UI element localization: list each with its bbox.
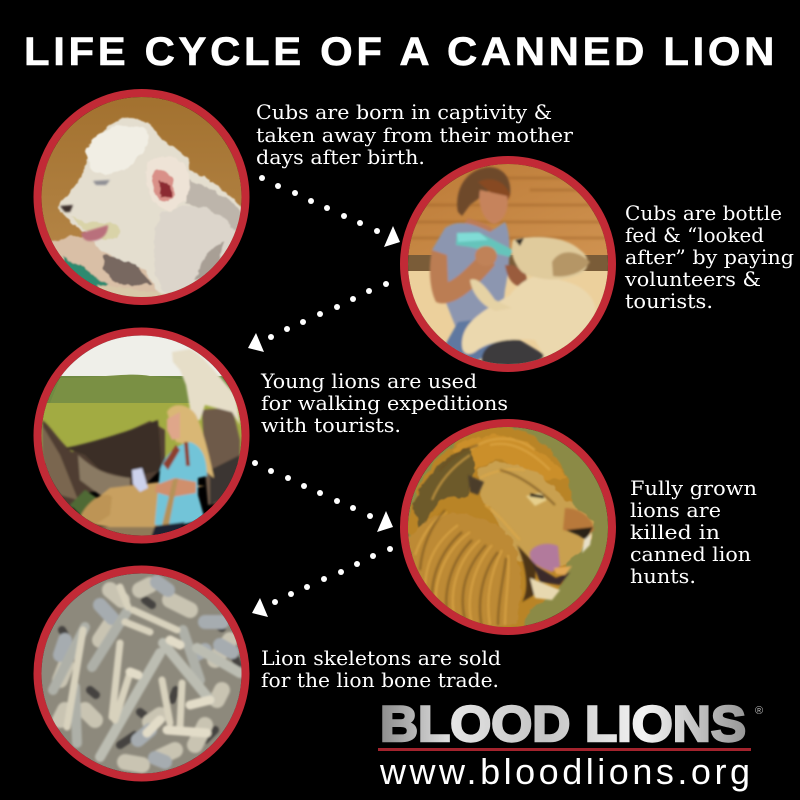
- text: step 5: [261, 646, 501, 692]
- logo: Blood Lions: ®: [755, 705, 763, 717]
- text: step 4: canned lion: [630, 542, 751, 566]
- text: step 2: [624, 201, 794, 313]
- arrow: step 1 to 2: [259, 175, 400, 247]
- text: step 5: Lion skeletons are sold: [261, 646, 501, 670]
- website url: www.bloodlions.org: [379, 751, 750, 792]
- text: step 2: fed & “looked: [625, 223, 764, 247]
- text: step 2: Cubs are bottle: [625, 201, 782, 225]
- panel: walking with lions photo: [38, 332, 246, 540]
- dark gaps: [62, 600, 238, 745]
- text: step 2: after” by paying: [625, 245, 794, 269]
- text: step 1: [256, 100, 573, 169]
- panel: adult lion photo: [404, 423, 612, 632]
- title: LIFE CYCLE OF A CANNED LION: [24, 30, 778, 74]
- text: step 5: for the lion bone trade.: [261, 668, 499, 692]
- arrow: step 3 to 4: [252, 460, 393, 532]
- logo: Blood Lions: BLOOD LIONS: [380, 696, 746, 752]
- text: step 1: days after birth.: [256, 145, 425, 169]
- text: step 4: hunts.: [630, 564, 696, 588]
- panel: cub photo: [38, 93, 246, 301]
- arrow: step 4 to 5: [252, 546, 393, 617]
- text: step 3: with tourists.: [261, 413, 401, 437]
- text: step 3: for walking expeditions: [261, 391, 508, 415]
- arrow: step 2 to 3: [248, 281, 389, 352]
- text: step 2: tourists.: [625, 289, 713, 313]
- text: step 4: lions are: [630, 498, 721, 522]
- text: step 1: Cubs are born in captivity &: [256, 100, 552, 124]
- text: step 3: Young lions are used: [260, 369, 477, 393]
- panel: bottle feeding photo: [404, 160, 612, 371]
- panel: bones photo: [38, 570, 246, 778]
- text: step 4: killed in: [630, 520, 720, 544]
- text: step 1: taken away from their mother: [256, 123, 573, 147]
- text: step 2: volunteers &: [624, 267, 761, 291]
- text: step 3: [260, 369, 508, 437]
- text: step 4: Fully grown: [630, 476, 757, 500]
- text: step 4: [630, 476, 757, 588]
